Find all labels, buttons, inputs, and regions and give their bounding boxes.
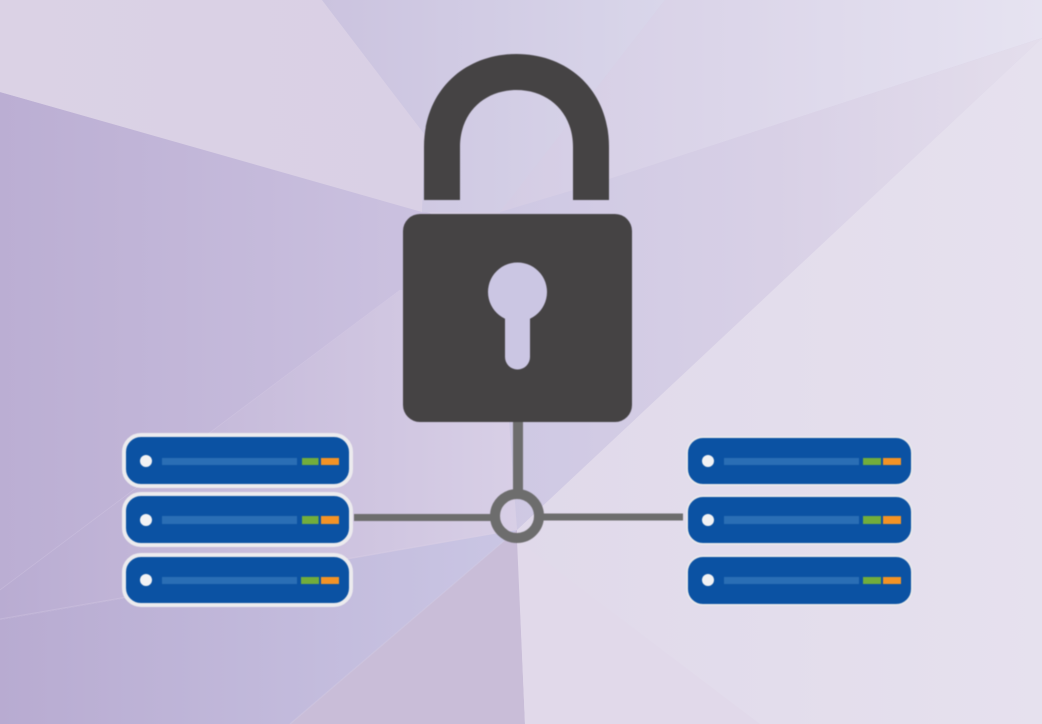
padlock body [403,214,632,422]
hub ring [495,494,539,538]
server unit [124,494,351,545]
right server stack [687,437,912,605]
left server stack [124,435,351,605]
server unit [687,556,912,605]
icon: padlock [403,54,632,422]
server unit [687,437,912,485]
server unit [124,435,351,486]
server unit [687,496,912,544]
padlock shackle [424,54,609,200]
connector lines and hub [354,420,683,538]
server unit [124,555,351,605]
padlock keyhole [488,262,547,370]
